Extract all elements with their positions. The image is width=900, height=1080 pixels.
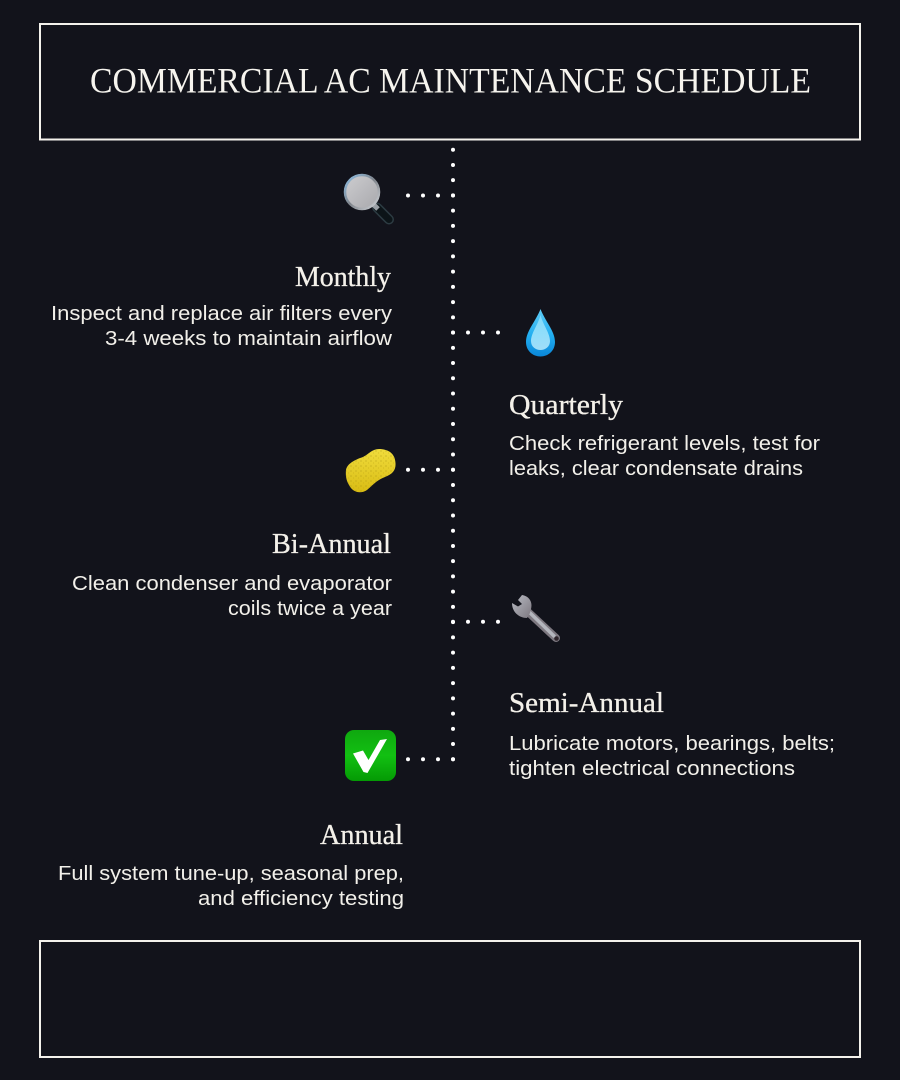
description: Monthly: Inspect and replace air filters every — [51, 302, 393, 325]
timeline: dotted vertical spine with connectors — [408, 150, 499, 761]
icon: water drop — [526, 309, 555, 356]
title: COMMERCIAL AC MAINTENANCE SCHEDULE — [90, 60, 811, 100]
description: Monthly: 3-4 weeks to maintain airflow — [105, 327, 392, 350]
icon: green check mark — [345, 730, 396, 781]
description: Semi-Annual: Lubricate motors, bearings, belts; — [509, 732, 835, 755]
header panel — [40, 24, 860, 140]
heading: Bi-Annual: Bi-Annual — [272, 529, 391, 560]
heading: Monthly: Monthly — [295, 262, 391, 293]
description: Semi-Annual: tighten electrical connections — [509, 757, 795, 780]
icon: wrench — [512, 595, 559, 641]
description: Annual — [58, 862, 404, 910]
description: Annual: and efficiency testing — [198, 887, 404, 910]
heading: Annual: Annual — [320, 820, 403, 851]
description: Bi-Annual: Clean condenser and evaporator — [72, 572, 392, 595]
heading: Semi-Annual: Semi-Annual — [509, 688, 664, 719]
description: Semi-Annual — [509, 732, 835, 780]
description: Monthly — [51, 302, 393, 350]
Semi-Annual item — [509, 688, 835, 780]
footer panel — [40, 941, 860, 1057]
icon: magnifying glass — [345, 175, 389, 220]
Monthly item — [51, 262, 393, 350]
description: Bi-Annual — [72, 572, 392, 620]
Annual item — [58, 820, 404, 910]
heading: Quarterly: Quarterly — [509, 390, 623, 421]
description: Annual: Full system tune-up, seasonal prep, — [58, 862, 404, 885]
Quarterly item — [509, 390, 820, 480]
description: Bi-Annual: coils twice a year — [228, 597, 392, 620]
Bi-Annual item — [72, 529, 392, 620]
description: Quarterly: Check refrigerant levels, test for — [509, 432, 820, 455]
description: Quarterly — [509, 432, 820, 480]
icon: sponge — [346, 449, 396, 492]
description: Quarterly: leaks, clear condensate drains — [509, 457, 803, 480]
